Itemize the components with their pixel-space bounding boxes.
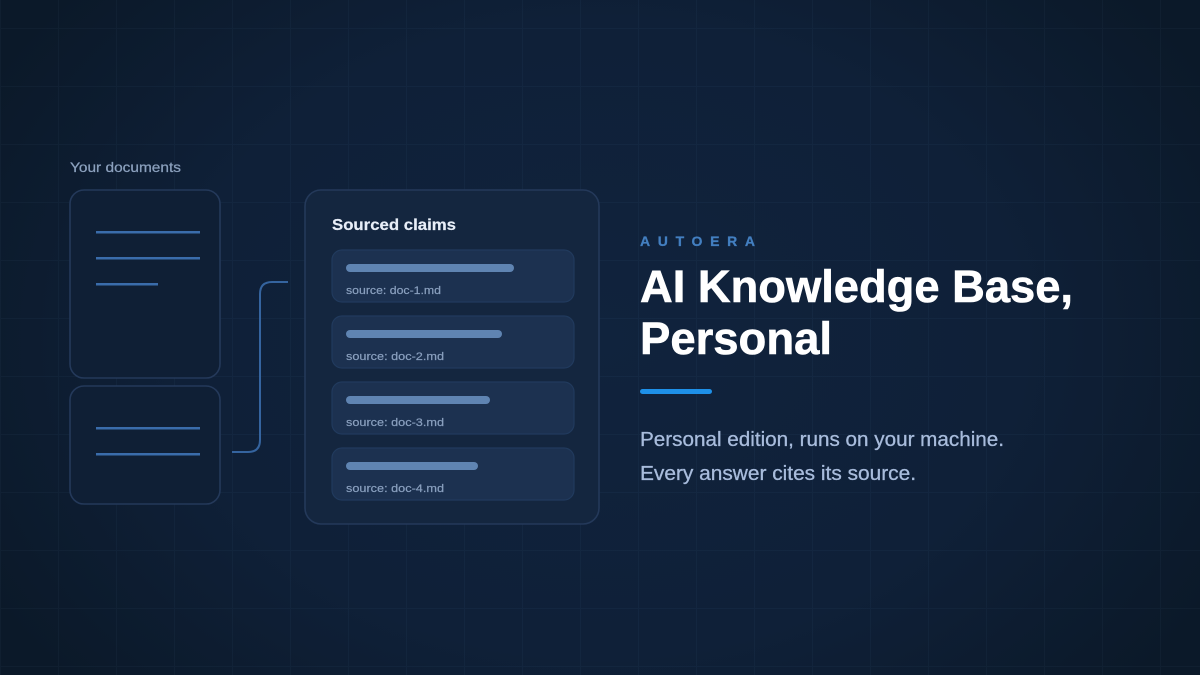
subtitle text: [640, 429, 1004, 485]
panel: sourced claims: [305, 190, 599, 524]
panel: document 2: [70, 386, 220, 504]
claim card 2: [332, 316, 574, 368]
accent rule: [640, 389, 712, 394]
claim card 2: source: doc-2.md: [346, 351, 444, 363]
claim card 4: source: doc-4.md: [346, 483, 444, 495]
subtitle text: Personal edition, runs on your machine.: [640, 429, 1004, 451]
panel: document 1: [70, 190, 220, 378]
title: [640, 261, 1073, 364]
subtitle text: Every answer cites its source.: [640, 463, 916, 485]
label: your documents: Your documents: [70, 159, 181, 175]
title: AI Knowledge Base,: [640, 261, 1073, 312]
claim card 4: [332, 448, 574, 500]
heading: sourced claims: Sourced claims: [332, 217, 456, 234]
eyebrow: brand name: AUTOERA: [640, 233, 755, 249]
title: Personal: [640, 313, 832, 364]
claim card 1: source: doc-1.md: [346, 285, 441, 297]
claim card 3: [332, 382, 574, 434]
claim card 1: [332, 250, 574, 302]
arrow: connector from documents to claims: [232, 282, 288, 452]
claim card 3: source: doc-3.md: [346, 417, 444, 429]
